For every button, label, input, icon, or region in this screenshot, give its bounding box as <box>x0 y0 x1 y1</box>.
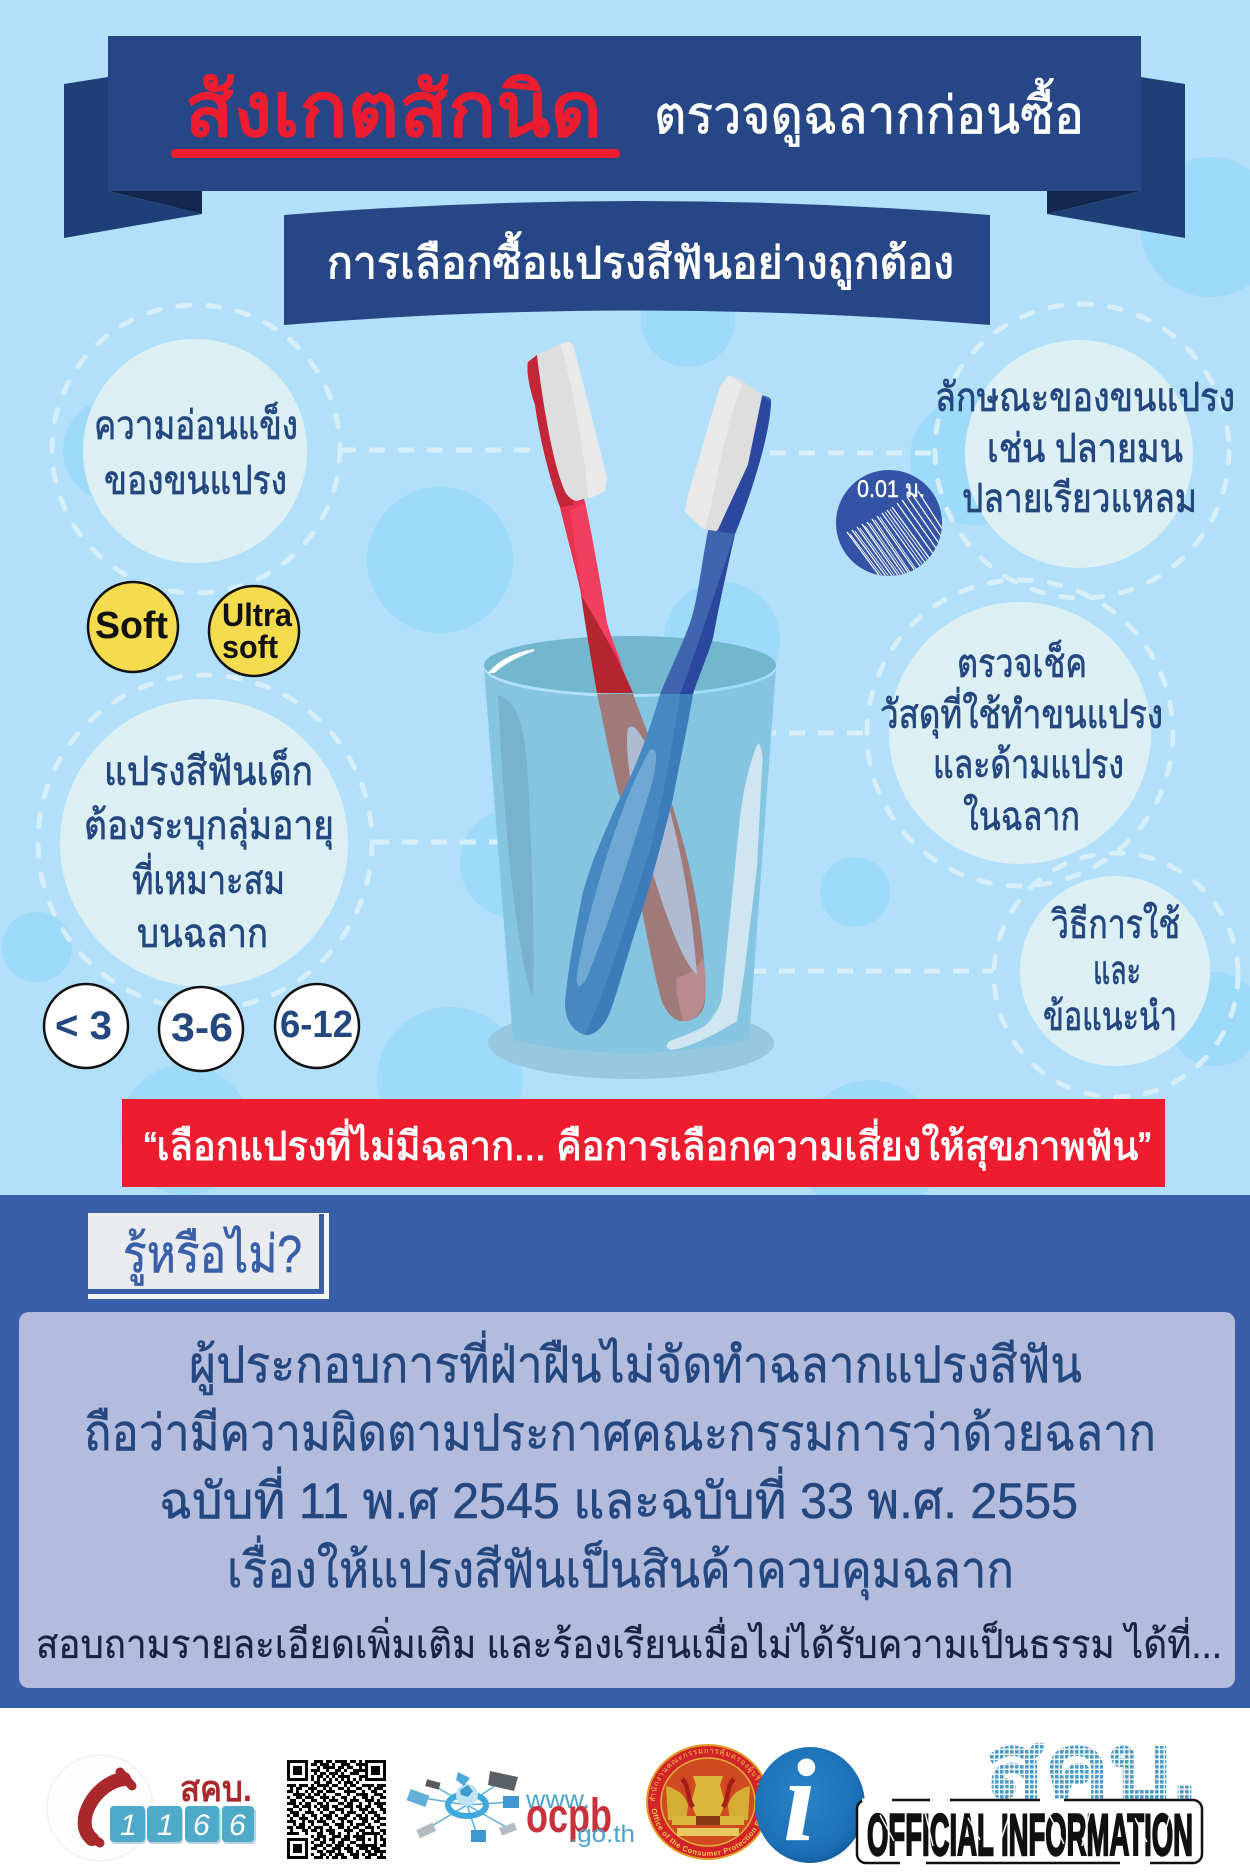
QR code <box>287 1760 386 1859</box>
panel: bristle characteristics: ปลายเรียวแหลม <box>962 477 1197 521</box>
panel: brush softness <box>52 305 340 593</box>
toothbrush: red <box>527 344 706 1021</box>
glass body <box>484 668 776 1053</box>
badge: 6-12 <box>275 984 359 1068</box>
icon: information: i <box>783 1735 816 1866</box>
logo: office seal <box>646 1744 763 1860</box>
glass base shadow <box>488 1007 774 1079</box>
panel: bristle characteristics <box>935 304 1235 598</box>
dashed connectors <box>340 450 993 971</box>
panel: usage instructions <box>994 853 1238 1097</box>
logo: hotline 1166: 6 <box>193 1809 210 1842</box>
panel: usage instructions: และ <box>1093 949 1141 993</box>
did you know label: รู้หรือไม่? <box>123 1225 302 1286</box>
panel: children's brushes: แปรงสีฟันเด็ก <box>104 747 313 794</box>
panel: bristle characteristics: เช่น ปลายมน <box>987 427 1183 471</box>
logo: office seal: Office of the Consumer Protection Board <box>652 1808 759 1856</box>
panel: check materials: ตรวจเช็ค <box>957 639 1087 686</box>
panel: did you know section <box>0 1195 1250 1708</box>
glass back rim <box>484 636 776 694</box>
panel: brush softness: ความอ่อนแข็ง <box>94 401 298 448</box>
title: red headline: สังเกตสักนิด <box>185 68 602 153</box>
badge: Soft: Soft <box>95 605 168 647</box>
panel: usage instructions: ข้อแนะนำ <box>1043 995 1177 1039</box>
callout: red banner <box>122 1099 1165 1187</box>
icon: information <box>755 1735 865 1866</box>
panel: usage instructions: วิธีการใช้ <box>1051 901 1180 947</box>
logo: dotted agency name: สคบ. <box>985 1717 1198 1816</box>
background bubbles <box>2 157 1250 1220</box>
badge: 6-12: 6-12 <box>280 1004 353 1046</box>
sub-heading ribbon <box>284 201 990 325</box>
legal notice box <box>19 1312 1235 1688</box>
title underline <box>171 149 620 158</box>
title: white text: ตรวจดูฉลากก่อนซื้อ <box>654 78 1084 147</box>
glass highlights <box>490 650 763 1050</box>
panel: check materials: วัสดุที่ใช้ทำขนแปรง <box>880 687 1163 739</box>
sub-heading ribbon: การเลือกซื้อแปรงสีฟันอย่างถูกต้อง <box>327 231 954 290</box>
logo: ocpb website <box>407 1771 635 1848</box>
legal notice box: ถือว่ามีความผิดตามประกาศคณะกรรมการว่าด้วยฉลาก <box>84 1405 1156 1461</box>
logo: ocpb website: ocpb <box>526 1790 612 1843</box>
panel: check materials <box>867 580 1173 886</box>
panel: children's brushes <box>38 675 372 1009</box>
badge: Ultra soft: soft <box>222 629 278 665</box>
badge: 3-6: 3-6 <box>171 1006 233 1050</box>
callout: red banner: “เลือกแปรงที่ไม่มีฉลาก... คือการเลือกความเสี่ยงให้สุขภาพฟัน” <box>144 1119 1151 1171</box>
legal notice box: ผู้ประกอบการที่ฝ่าฝืนไม่จัดทำฉลากแปรงสีฟัน <box>189 1331 1082 1395</box>
logo: hotline 1166: 1 <box>120 1809 137 1842</box>
panel: check materials: ในฉลาก <box>963 793 1080 839</box>
icon: bristle tip diagram <box>836 470 942 576</box>
logo: hotline 1166: 1 <box>157 1809 174 1842</box>
badge: Ultra soft <box>209 586 299 676</box>
logo: office seal: สำนักงานคณะกรรมการคุ้มครองผู้บริโภค <box>649 1748 760 1802</box>
icon: bristle tip diagram: 0.01 ม. <box>857 476 925 503</box>
panel: children's brushes: บนฉลาก <box>137 912 268 956</box>
badge: Soft <box>88 582 178 672</box>
logo: hotline 1166: สคบ. <box>180 1768 252 1809</box>
panel: check materials: และด้ามแปรง <box>933 743 1124 787</box>
legal notice box: เรื่องให้แปรงสีฟันเป็นสินค้าควบคุมฉลาก <box>227 1536 1014 1600</box>
header ribbon <box>64 36 1185 238</box>
toothbrush: blue <box>565 378 771 1035</box>
badge: under 3 <box>44 984 128 1068</box>
badge: under 3: < 3 <box>55 1004 112 1048</box>
legal notice box: ฉบับที่ 11 พ.ศ 2545 และฉบับที่ 33 พ.ศ. 2555 <box>159 1467 1078 1529</box>
logo: ocpb website: www. <box>525 1784 590 1814</box>
logo: ocpb website: .go.th <box>570 1821 635 1848</box>
panel: brush softness: ของขนแปรง <box>104 459 287 503</box>
badge: 3-6 <box>159 987 243 1071</box>
badge: Ultra soft: Ultra <box>222 597 292 633</box>
did you know label <box>88 1213 329 1299</box>
logo: hotline 1166: 6 <box>229 1809 246 1842</box>
panel: children's brushes: ต้องระบุกลุ่มอายุ <box>84 804 334 850</box>
panel: children's brushes: ที่เหมาะสม <box>132 853 285 903</box>
logo: hotline 1166 <box>47 1755 256 1861</box>
footer <box>0 1708 1250 1875</box>
